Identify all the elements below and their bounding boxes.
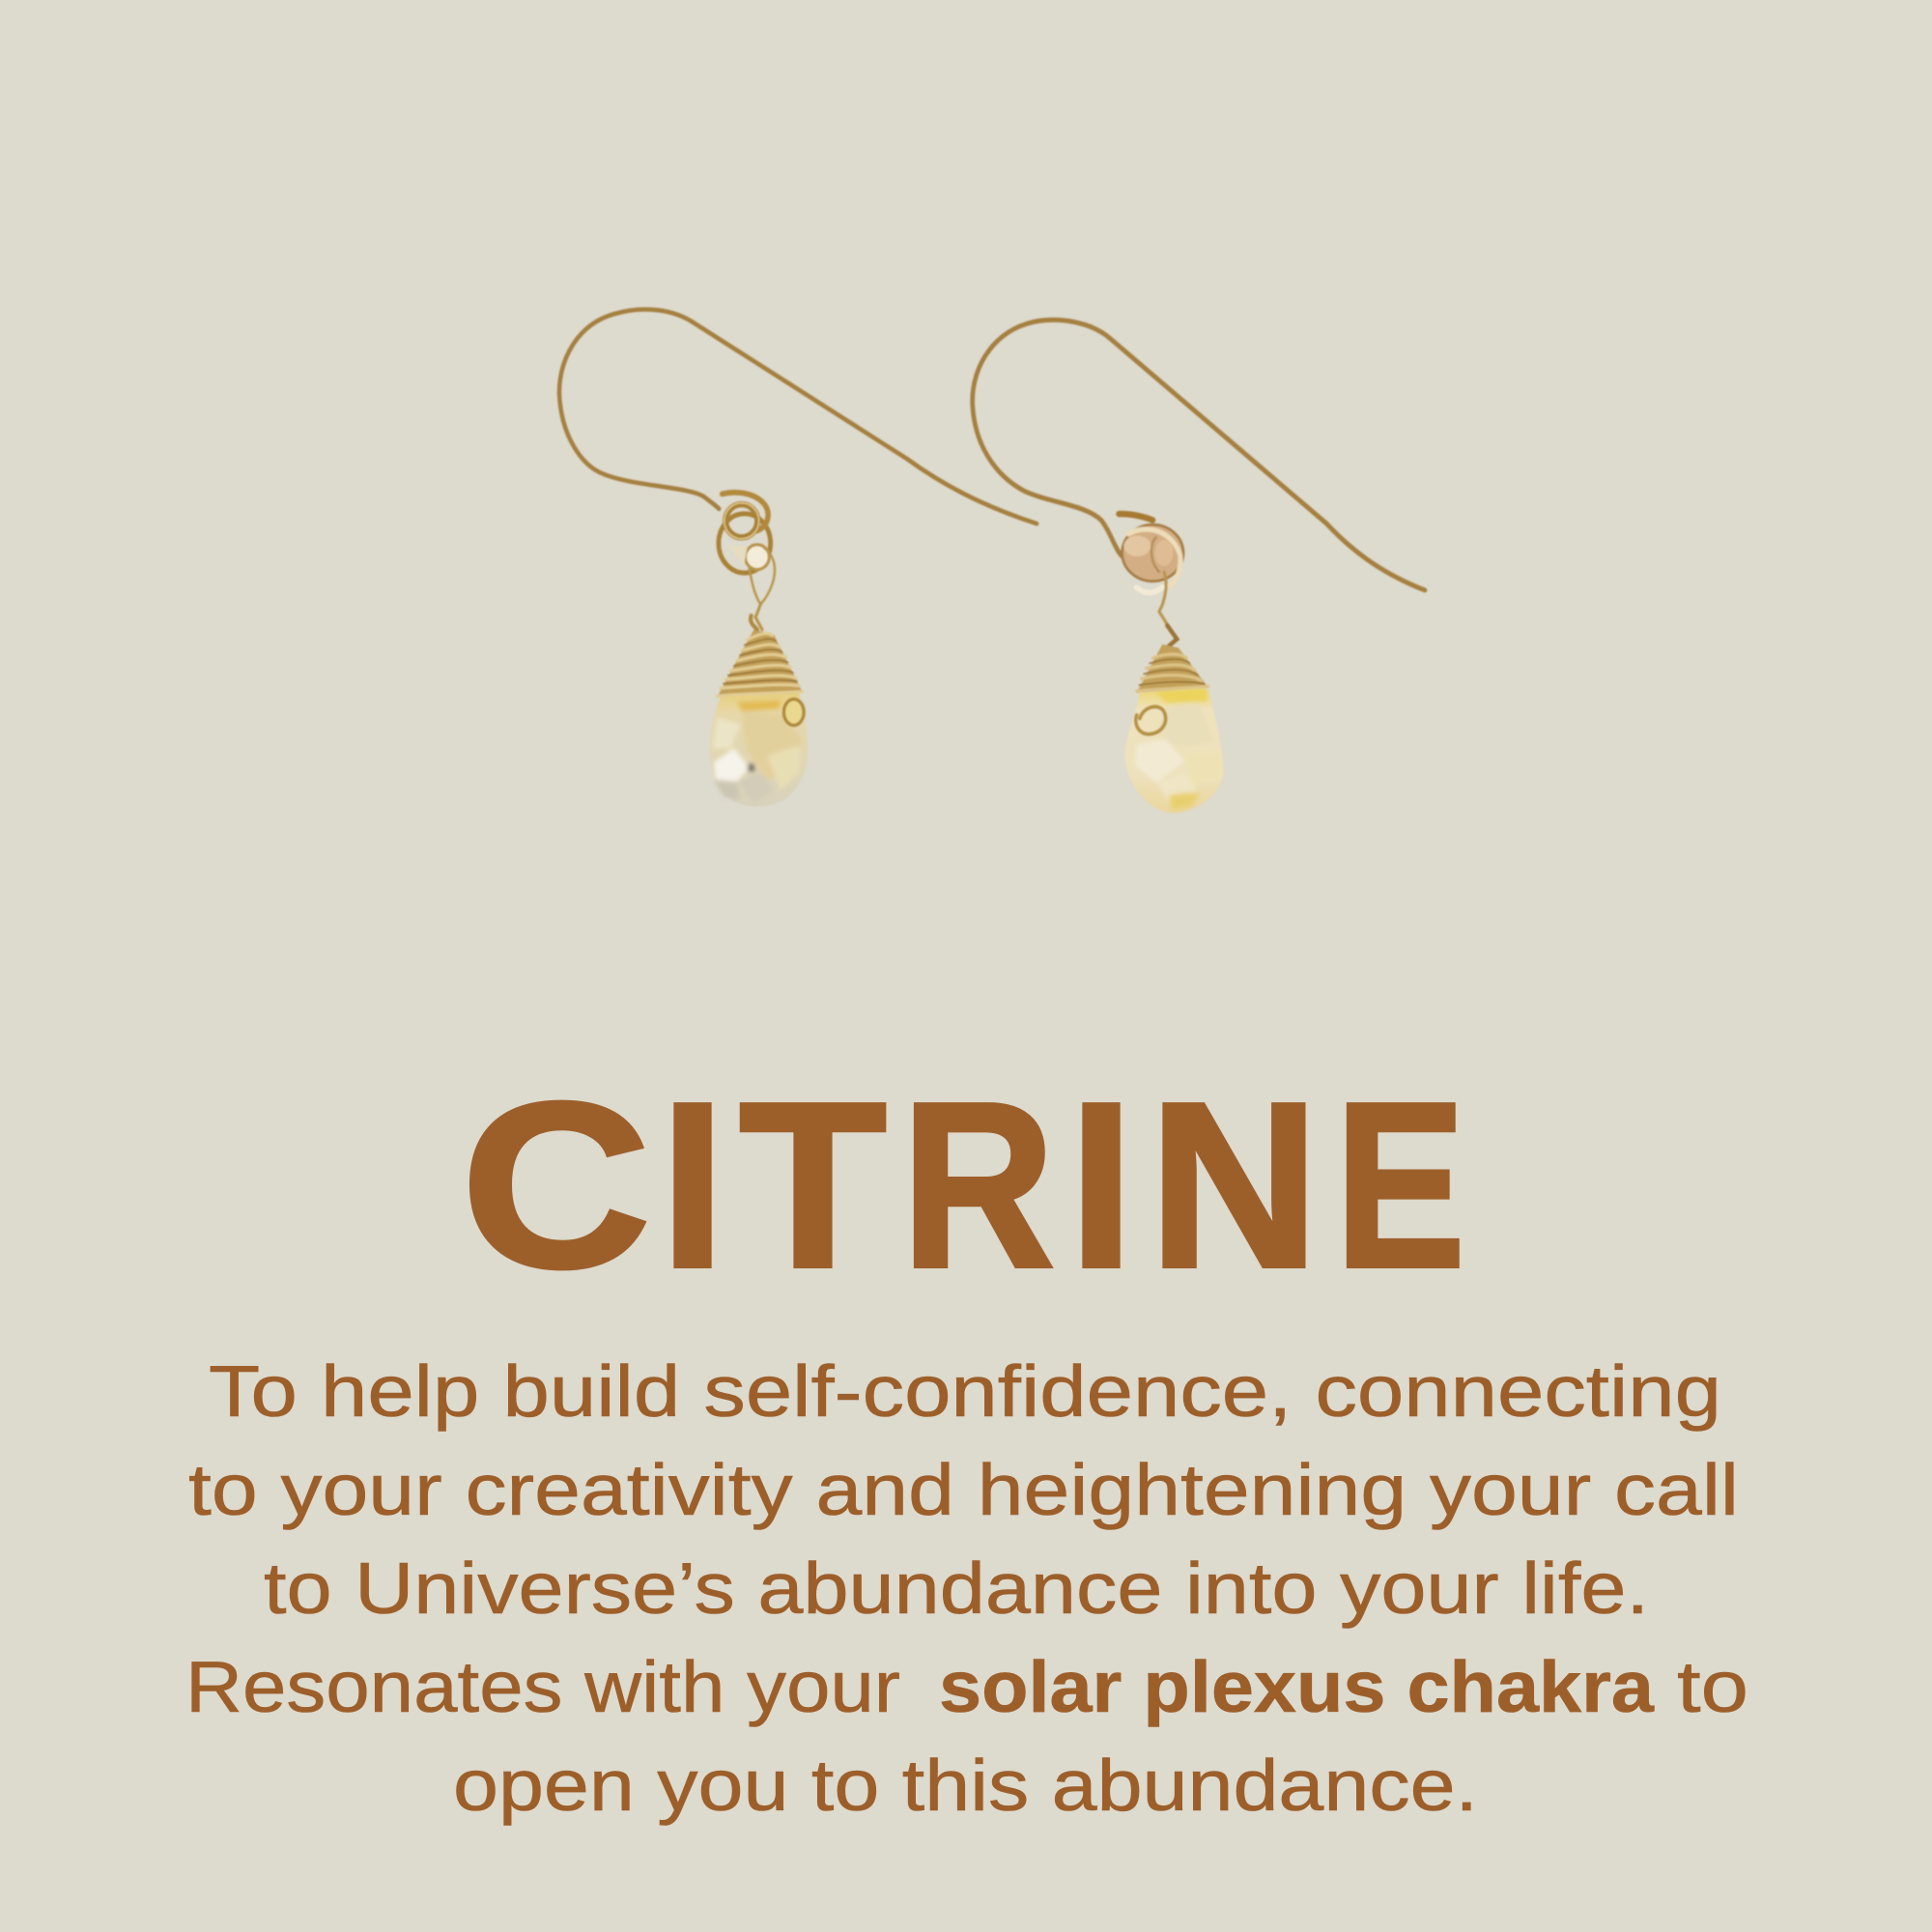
title: T [739,1053,887,1317]
description line 3: to Universe’s abundance into your life. [264,1548,1649,1629]
right bail wire [1159,572,1177,646]
title: C [461,1053,651,1317]
left bail wire [749,548,775,630]
title: I [660,1053,725,1317]
left gemstone [710,694,808,807]
description line 4 with bold phrase: to [1677,1646,1748,1727]
description text block [185,1350,1748,1826]
description line 1: To help build self-confidence, connecting [209,1350,1721,1432]
left wire wrap [718,615,804,725]
description line 5: open you to this abundance. [453,1745,1478,1826]
description line 2: to your creativity and heightening your call [188,1449,1739,1530]
title: N [1149,1053,1320,1317]
earring: left citrine drop [559,309,1037,807]
left jump rings [719,493,771,573]
title: R [901,1053,1055,1317]
earring: right citrine drop [973,320,1425,813]
right jump rings [1119,514,1183,593]
description line 4 with bold phrase: Resonates with your [185,1646,900,1727]
right hook wire [973,320,1425,590]
right gemstone [1124,688,1224,813]
title: E [1335,1053,1465,1317]
title: I [1068,1053,1134,1317]
left hook wire [559,309,1037,524]
right wire wrap [1136,644,1208,734]
description line 4 with bold phrase: solar plexus chakra [939,1646,1655,1727]
